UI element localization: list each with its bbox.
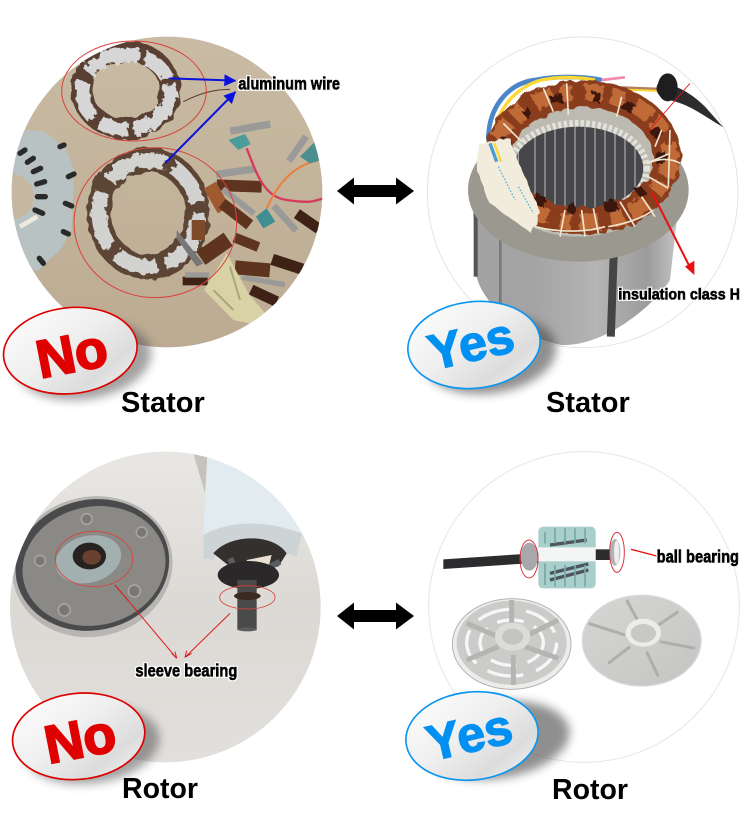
red bearing highlights <box>520 532 624 578</box>
red highlight circles <box>62 41 237 298</box>
panel: stator yes <box>427 37 740 348</box>
panel: rotor yes <box>429 452 739 762</box>
end shield disc right <box>582 595 701 686</box>
badge: Yes stator <box>404 295 561 402</box>
caption: Rotor yes: Rotor <box>552 774 628 806</box>
red arrows to sleeve bearing <box>115 585 230 658</box>
panel: stator no <box>0 33 340 350</box>
badge: Yes rotor: Yes <box>421 698 518 772</box>
badge: No rotor: No <box>40 704 121 776</box>
photo: rotor with sleeve bearing <box>0 450 327 767</box>
badge: No rotor <box>8 687 165 792</box>
badge: No stator: No <box>31 319 112 390</box>
photo: damaged stators with aluminum wire <box>0 33 327 350</box>
red highlight ellipses <box>55 531 275 609</box>
label: sleeve bearing: sleeve bearing <box>135 660 237 680</box>
badge: No stator <box>0 301 156 408</box>
photo: copper wound stator <box>468 73 723 345</box>
circle outline <box>429 452 739 762</box>
caption: Stator no: Stator <box>121 387 205 419</box>
panel: rotor no <box>0 450 327 767</box>
blue arrows to aluminum wire <box>165 78 235 163</box>
arrow: stator comparison <box>337 178 414 204</box>
arrow: rotor comparison <box>337 602 414 630</box>
label: aluminum wire: aluminum wire <box>238 74 340 94</box>
photo: rotor with ball bearings <box>443 527 620 588</box>
badge: Yes rotor <box>401 685 575 788</box>
caption: Rotor no: Rotor <box>122 773 198 805</box>
caption: Stator yes: Stator <box>546 387 630 419</box>
badge: Yes stator: Yes <box>423 307 519 381</box>
circle outline <box>427 37 738 348</box>
red arrows to winding <box>647 83 694 275</box>
red pointer line <box>631 549 657 556</box>
end shield disc left <box>452 599 571 689</box>
